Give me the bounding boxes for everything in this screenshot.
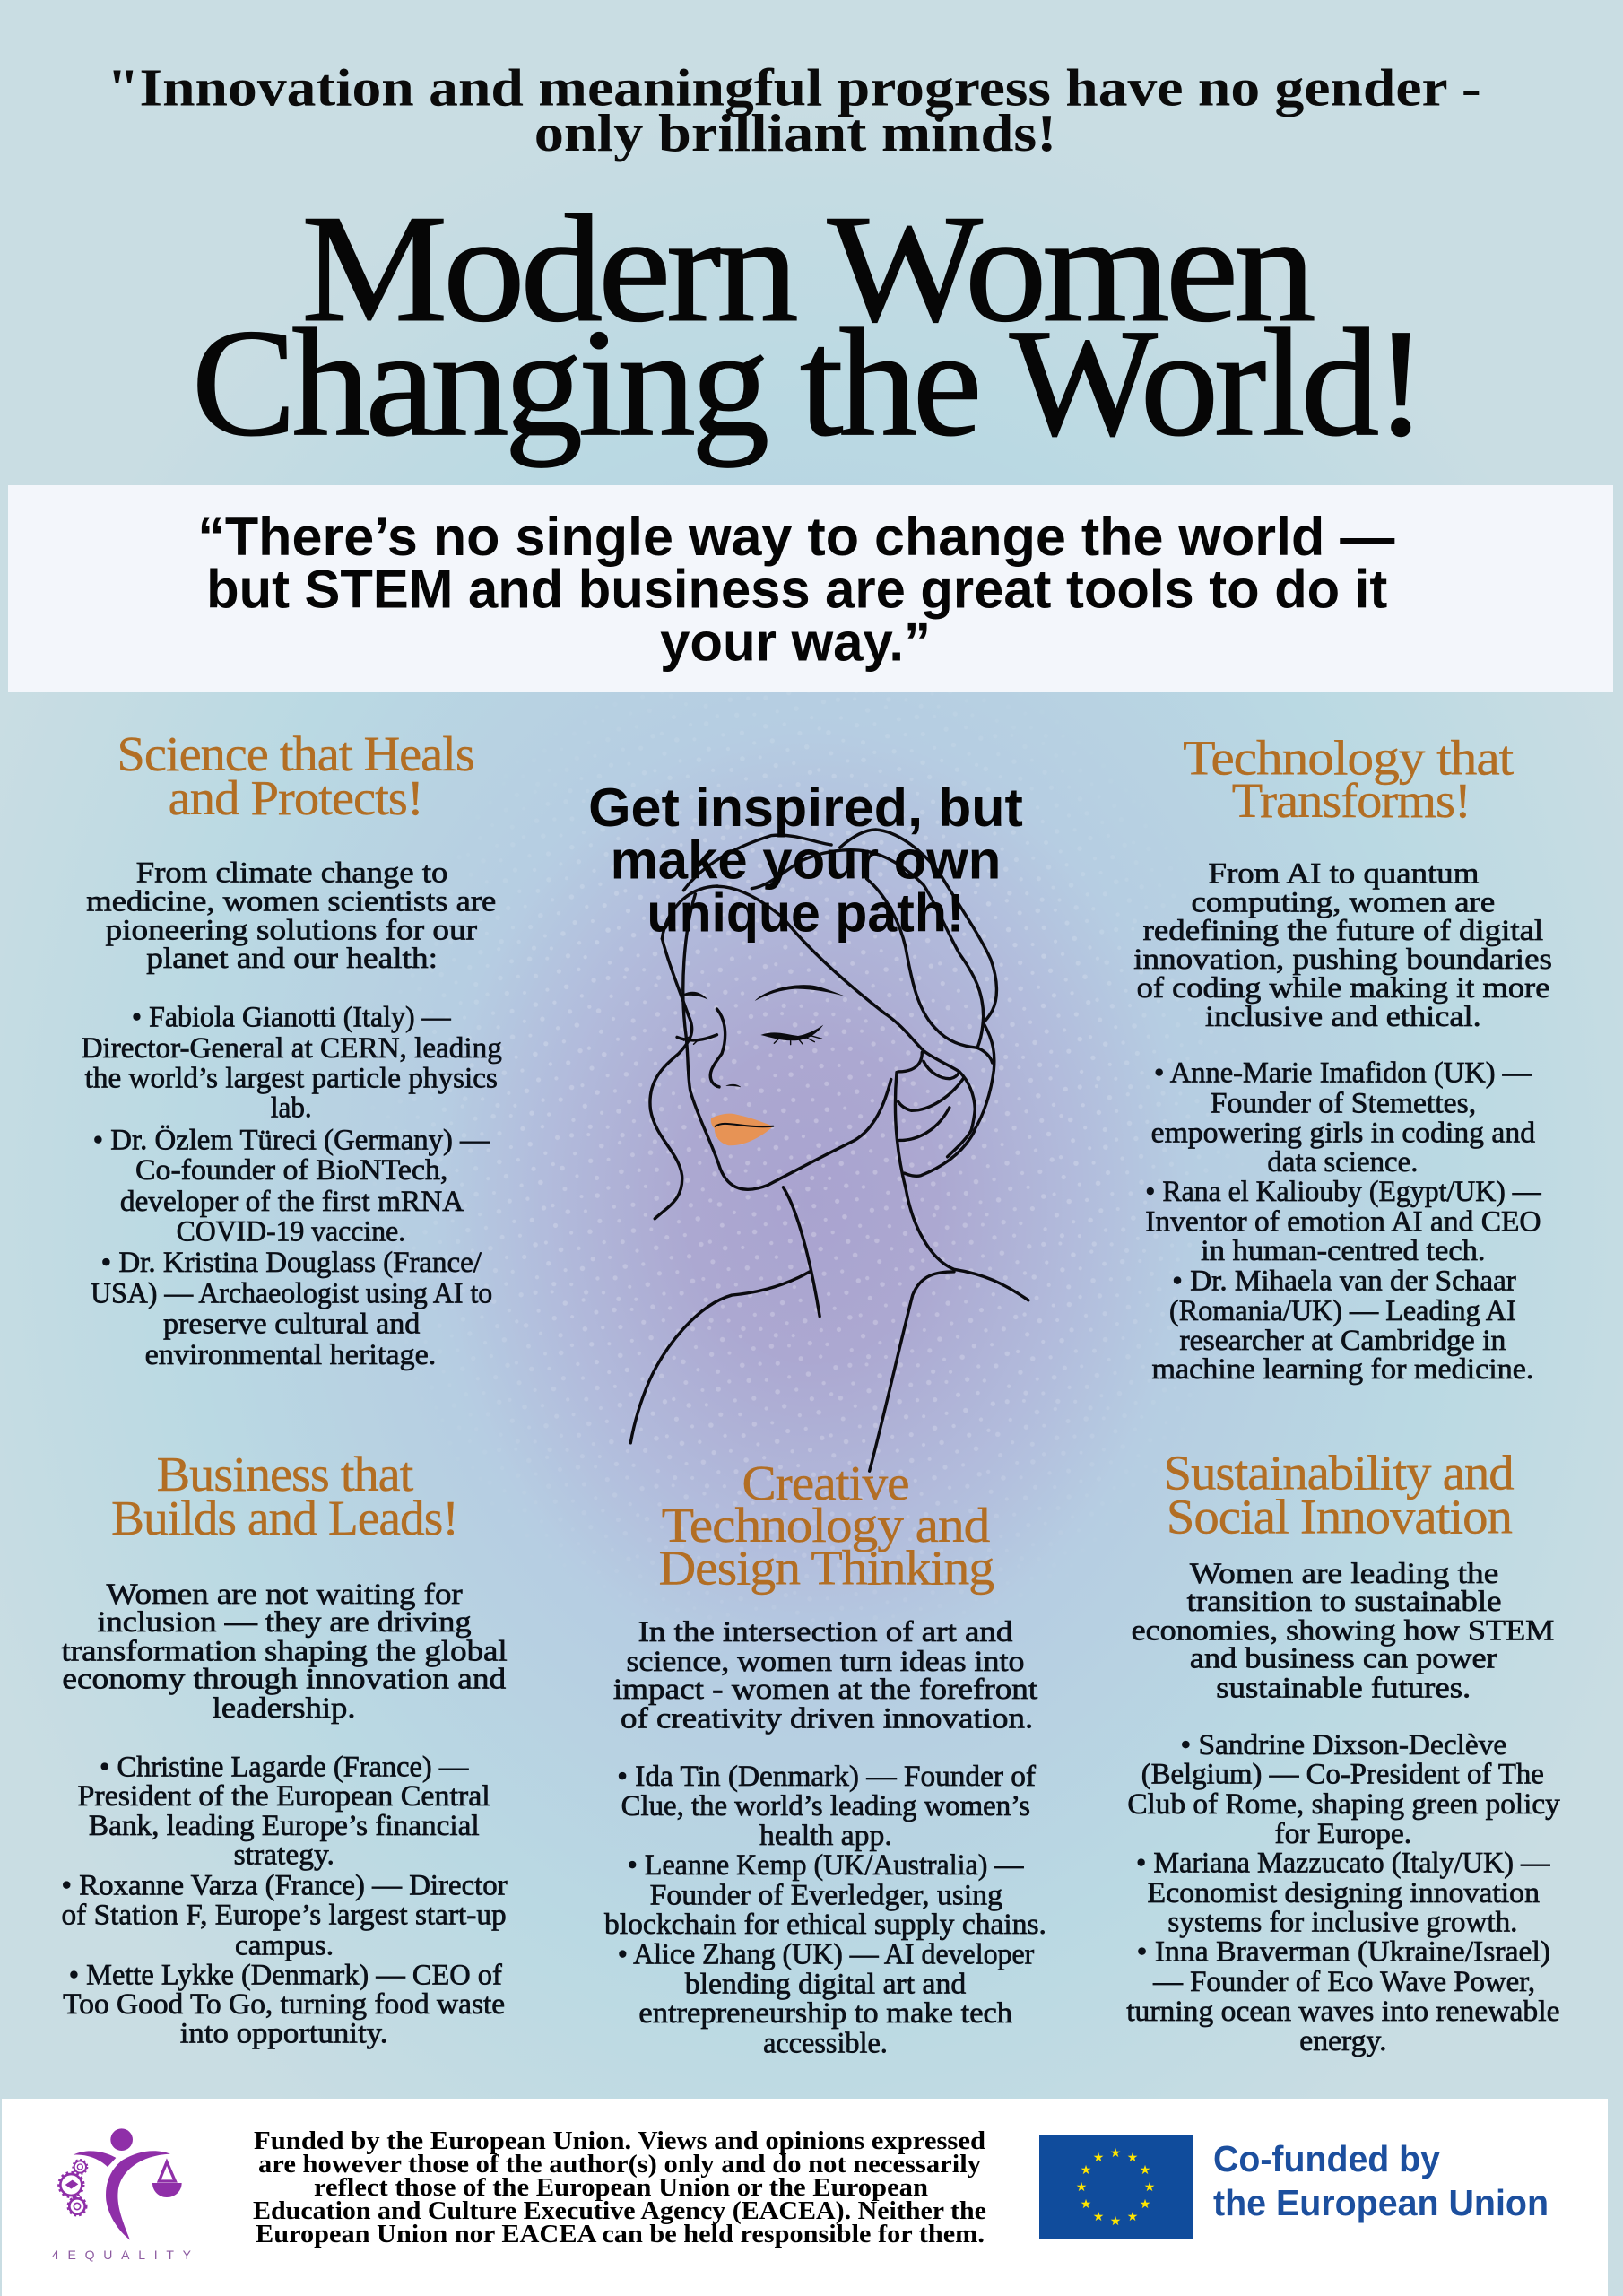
text: technology intro: of coding while making it more — [1137, 972, 1549, 1004]
heading: creative technology: Technology and — [662, 1498, 990, 1552]
text: technology women list: empowering girls in coding and — [1151, 1118, 1535, 1150]
text: technology intro: inclusive and ethical. — [1205, 1001, 1481, 1033]
center heading: get inspired: unique path! — [647, 882, 965, 943]
text: sustainability intro: Women are leading the — [1190, 1558, 1498, 1590]
text: sustainability women list: energy. — [1299, 2025, 1387, 2057]
center heading: get inspired: Get inspired, but — [588, 777, 1023, 838]
text: technology women list: data science. — [1267, 1146, 1419, 1178]
icon: EU flag: ★ — [1093, 2210, 1104, 2224]
panel: science — [82, 726, 502, 1371]
text: sustainability women list: (Belgium) — Co-President of The — [1141, 1759, 1544, 1791]
disclaimer text: are however those of the author(s) only and do not necessarily — [258, 2150, 982, 2179]
text: science intro: pioneering solutions for our — [106, 914, 477, 946]
icon: EU flag: ★ — [1081, 2163, 1091, 2178]
disclaimer text: Education and Culture Executive Agency (EACEA). Neither the — [253, 2196, 986, 2225]
text: technology intro — [1133, 858, 1552, 1033]
top quote: "Innovation and meaningful progress have no gender - — [107, 59, 1481, 117]
text: creative intro: of creativity driven innovation. — [621, 1703, 1033, 1735]
text: sustainability women list: • Inna Braverman (Ukraine/Israel) — [1137, 1936, 1550, 1969]
icon: lips — [711, 1114, 773, 1145]
icon: EU flag: ★ — [1140, 2197, 1150, 2212]
disclaimer text: Funded by the European Union. Views and opinions expressed — [254, 2126, 985, 2155]
text: creative women list — [604, 1761, 1046, 2059]
heading: business: Builds and Leads! — [111, 1491, 458, 1545]
dotted texture — [456, 739, 1170, 1565]
text: business intro: leadership. — [213, 1692, 356, 1725]
main title: Modern Women — [301, 184, 1315, 354]
text: sustainability women list: systems for inclusive growth. — [1167, 1907, 1517, 1939]
heading: science: and Protects! — [169, 770, 423, 825]
text: creative intro — [613, 1616, 1037, 1735]
text: sustainability women list: • Sandrine Dixson-Declève — [1180, 1729, 1506, 1761]
text: science women list: Co-founder of BioNTech, — [135, 1154, 447, 1187]
main title — [192, 184, 1422, 468]
text: sustainability women list: • Mariana Mazzucato (Italy/UK) — — [1136, 1848, 1550, 1880]
icon: closed right eye — [760, 1025, 823, 1045]
text: technology women list: • Anne-Marie Imafidon (UK) — — [1154, 1057, 1532, 1090]
main title: Changing the World! — [192, 298, 1422, 468]
text: creative women list: blending digital art and — [685, 1969, 966, 2001]
text: business women list: Bank, leading Europe’s financial — [89, 1810, 480, 1842]
text: technology women list: machine learning for medicine. — [1151, 1353, 1533, 1386]
text: co-funded by the European Union: Co-funded by — [1213, 2138, 1440, 2179]
heading: technology — [1183, 731, 1514, 828]
logo: 4EQUALITY — [52, 2128, 192, 2262]
text: science intro: From climate change to — [136, 857, 447, 890]
icon: EU flag: ★ — [1076, 2180, 1087, 2195]
text: creative women list: accessible. — [763, 2027, 888, 2059]
heading: technology: Technology that — [1183, 731, 1514, 786]
text: sustainability women list — [1126, 1729, 1561, 2057]
text: creative women list: • Leanne Kemp (UK/Australia) — — [628, 1849, 1024, 1882]
footer band — [2, 2099, 1608, 2296]
text: technology intro: computing, women are — [1192, 887, 1495, 919]
white quote band: “There’s no single way to change the world — — [197, 506, 1395, 567]
text: business women list: • Mette Lykke (Denmark) — CEO of — [69, 1959, 502, 1991]
text: business women list: into opportunity. — [180, 2018, 388, 2050]
illustration: woman's face line art — [630, 830, 1028, 1471]
heading: sustainability — [1164, 1445, 1514, 1544]
text: science women list: Director-General at CERN, leading — [82, 1032, 502, 1065]
text: business women list: of Station F, Europe’s largest start-up — [62, 1899, 507, 1931]
center heading: get inspired: make your own — [611, 830, 1001, 891]
text: sustainability intro: and business can power — [1190, 1643, 1497, 1675]
text: technology women list — [1145, 1057, 1541, 1386]
heading: science: Science that Heals — [117, 726, 474, 781]
text: sustainability intro: sustainable futures. — [1216, 1672, 1471, 1704]
panel: creative technology — [604, 1456, 1046, 2059]
text: science women list: preserve cultural and — [163, 1309, 420, 1341]
heading: business — [111, 1447, 458, 1545]
icon: EU flag: ★ — [1110, 2214, 1121, 2229]
text: creative women list: Founder of Everledger, using — [650, 1879, 1002, 1911]
text: sustainability intro — [1132, 1558, 1554, 1704]
text: business women list: • Christine Lagarde (France) — — [100, 1751, 469, 1783]
text: creative women list: Clue, the world’s leading women’s — [621, 1790, 1030, 1822]
text: technology women list: researcher at Cambridge in — [1179, 1325, 1506, 1357]
text: business women list: • Roxanne Varza (France) — Director — [62, 1870, 508, 1902]
text: science women list: the world’s largest particle physics — [85, 1062, 498, 1094]
disclaimer text: reflect those of the European Union or the European — [314, 2173, 928, 2202]
text: science women list: environmental heritage. — [145, 1339, 436, 1371]
text: co-funded by the European Union — [1213, 2138, 1549, 2223]
text: science women list: • Dr. Kristina Douglass (France/ — [101, 1247, 482, 1279]
text: science women list: COVID-19 vaccine. — [177, 1216, 405, 1248]
logo: 4EQUALITY: 4EQUALITY — [52, 2248, 192, 2262]
panel: business — [62, 1447, 508, 2050]
text: technology women list: Inventor of emotion AI and CEO — [1145, 1205, 1541, 1238]
text: sustainability women list: — Founder of Eco Wave Power, — [1152, 1966, 1535, 1998]
top quote: only brilliant minds! — [534, 104, 1056, 162]
icon: EU flag: ★ — [1127, 2210, 1138, 2224]
text: technology intro: innovation, pushing boundaries — [1133, 944, 1552, 976]
heading: business: Business that — [157, 1447, 413, 1501]
panel: sustainability — [1126, 1445, 1561, 2057]
white quote band — [8, 485, 1613, 692]
text: technology women list: in human-centred tech. — [1201, 1235, 1486, 1267]
text: creative intro: science, women turn ideas into — [627, 1646, 1024, 1678]
text: science intro: medicine, women scientists are — [86, 886, 496, 918]
disclaimer text: European Union nor EACEA can be held responsible for them. — [256, 2220, 985, 2248]
text: creative intro: In the intersection of art and — [638, 1616, 1012, 1648]
text: technology women list: • Dr. Mihaela van der Schaar — [1172, 1265, 1516, 1297]
heading: creative technology — [658, 1456, 994, 1596]
heading: science — [117, 726, 474, 825]
text: science intro: planet and our health: — [146, 943, 438, 975]
panel: technology — [1133, 731, 1552, 1386]
text: business women list: President of the European Central — [78, 1780, 490, 1813]
icon: nose — [726, 1084, 741, 1087]
heading: creative technology: Creative — [742, 1456, 909, 1510]
icon: EU flag — [1039, 2135, 1193, 2239]
text: creative women list: entrepreneurship to make tech — [638, 1997, 1012, 2030]
heading: sustainability: Sustainability and — [1164, 1445, 1514, 1500]
text: technology women list: • Rana el Kaliouby (Egypt/UK) — — [1145, 1176, 1541, 1208]
text: science women list: • Dr. Özlem Türeci (Germany) — — [93, 1125, 490, 1157]
text: sustainability intro: transition to sustainable — [1187, 1586, 1502, 1618]
text: technology intro: redefining the future of digital — [1143, 915, 1543, 947]
text: co-funded by the European Union: the European Union — [1213, 2182, 1549, 2223]
text: business women list — [62, 1751, 508, 2050]
text: technology women list: Founder of Stemettes, — [1211, 1088, 1476, 1120]
heading: creative technology: Design Thinking — [658, 1541, 994, 1596]
text: sustainability intro: economies, showing how STEM — [1132, 1615, 1554, 1648]
text: sustainability women list: for Europe. — [1275, 1818, 1411, 1850]
icon: EU flag: ★ — [1081, 2197, 1091, 2212]
text: creative women list: • Alice Zhang (UK) — AI developer — [618, 1938, 1034, 1970]
text: technology intro: From AI to quantum — [1208, 858, 1479, 891]
text: science intro — [86, 857, 496, 975]
text: business intro: inclusion — they are driving — [98, 1606, 472, 1639]
text: creative women list: health app. — [759, 1820, 892, 1852]
icon: EU flag: ★ — [1127, 2151, 1138, 2165]
white quote band: but STEM and business are great tools to do it — [206, 559, 1387, 620]
top quote — [107, 59, 1481, 162]
icon: EU flag: ★ — [1110, 2146, 1121, 2161]
text: science women list: USA) — Archaeologist using AI to — [91, 1277, 492, 1309]
text: business intro: Women are not waiting for — [107, 1578, 463, 1611]
text: science women list: • Fabiola Gianotti (Italy) — — [132, 1002, 451, 1034]
text: creative women list: • Ida Tin (Denmark) — Founder of — [617, 1761, 1036, 1793]
icon: EU flag: ★ — [1144, 2180, 1155, 2195]
text: sustainability women list: Club of Rome, shaping green policy — [1127, 1788, 1561, 1821]
text: sustainability women list: Economist designing innovation — [1148, 1877, 1540, 1909]
text: business women list: Too Good To Go, turning food waste — [63, 1988, 505, 2021]
text: science women list — [82, 1002, 502, 1371]
text: business women list: campus. — [235, 1930, 334, 1962]
heading: sustainability: Social Innovation — [1167, 1489, 1513, 1544]
disclaimer text — [253, 2126, 986, 2248]
text: science women list: developer of the first mRNA — [120, 1186, 464, 1218]
text: business women list: strategy. — [234, 1839, 334, 1871]
text: creative women list: blockchain for ethical supply chains. — [604, 1909, 1046, 1941]
text: business intro — [62, 1578, 508, 1725]
text: business intro: economy through innovation and — [62, 1663, 506, 1696]
text: sustainability women list: turning ocean waves into renewable — [1126, 1996, 1559, 2028]
text: science women list: lab. — [271, 1092, 312, 1125]
text: creative intro: impact - women at the forefront — [613, 1674, 1037, 1706]
icon: EU flag: ★ — [1140, 2163, 1150, 2178]
white quote band: your way.” — [660, 611, 931, 672]
icon: EU flag: ★ — [1093, 2151, 1104, 2165]
text: technology women list: (Romania/UK) — Leading AI — [1169, 1295, 1516, 1327]
heading: technology: Transforms! — [1232, 773, 1471, 828]
text: business intro: transformation shaping the global — [62, 1635, 508, 1667]
center heading: get inspired — [588, 777, 1023, 943]
icon: right eyebrow — [755, 985, 846, 1001]
